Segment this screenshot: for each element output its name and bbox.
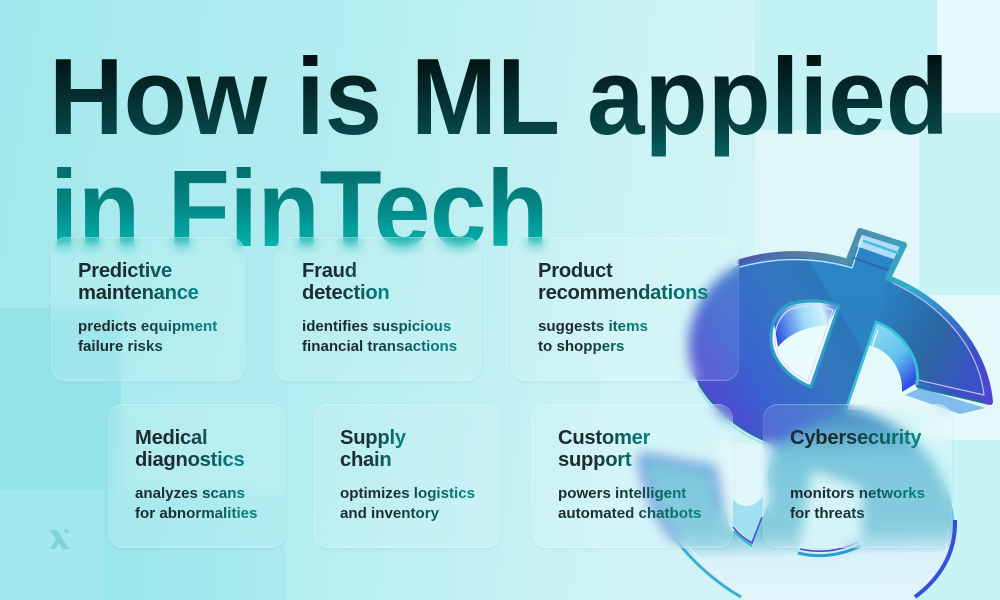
heading: Fraud <box>302 260 357 282</box>
description: automated chatbots <box>558 505 701 522</box>
heading <box>538 260 708 304</box>
description: predicts equipment <box>78 318 217 335</box>
heading: Medical <box>135 427 207 449</box>
heading: Product <box>538 260 613 282</box>
description <box>302 317 457 357</box>
heading: diagnostics <box>135 449 244 471</box>
icon: logo mark <box>50 529 69 549</box>
dollar upper counter <box>770 300 840 387</box>
heading <box>558 427 650 471</box>
description: suggests items <box>538 318 648 335</box>
description <box>538 317 648 357</box>
heading: maintenance <box>78 282 199 304</box>
title line one: How is ML applied <box>49 37 949 158</box>
heading: support <box>558 449 631 471</box>
description: for abnormalities <box>135 505 257 522</box>
dollar upper aperture <box>847 322 988 414</box>
heading <box>302 260 389 304</box>
dollar lower inner wall <box>716 440 770 546</box>
description <box>558 484 701 524</box>
panel: supply chain <box>313 404 501 548</box>
description <box>340 484 475 524</box>
panel: cybersecurity <box>763 404 952 548</box>
heading: recommendations <box>538 282 708 304</box>
description: optimizes logistics <box>340 485 475 502</box>
panel: predictive maintenance <box>51 237 245 381</box>
description: monitors networks <box>790 485 925 502</box>
panel: customer support <box>531 404 733 548</box>
dollar body <box>640 228 992 600</box>
panel: medical diagnostics <box>108 404 285 548</box>
dollar upper edge bevel <box>698 231 990 444</box>
heading <box>135 427 244 471</box>
description: powers intelligent <box>558 485 686 502</box>
heading: chain <box>340 449 391 471</box>
description: financial transactions <box>302 338 457 355</box>
heading: Customer <box>558 427 650 449</box>
heading: Cybersecurity <box>790 427 921 449</box>
panel: fraud detection <box>275 237 481 381</box>
heading: detection <box>302 282 389 304</box>
description: for threats <box>790 505 865 522</box>
dollar lower edge <box>640 455 955 597</box>
heading <box>78 260 199 304</box>
description: failure risks <box>78 338 163 355</box>
description: analyzes scans <box>135 485 245 502</box>
description: identifies suspicious <box>302 318 451 335</box>
description: to shoppers <box>538 338 624 355</box>
description <box>78 317 217 357</box>
title line two: in FinTech <box>50 149 548 270</box>
description: and inventory <box>340 505 439 522</box>
heading: Predictive <box>78 260 172 282</box>
icon: glass dollar sign <box>631 228 993 600</box>
description <box>790 484 925 524</box>
panel: product recommendations <box>511 237 739 381</box>
heading <box>340 427 406 471</box>
description <box>135 484 257 524</box>
heading: Supply <box>340 427 406 449</box>
